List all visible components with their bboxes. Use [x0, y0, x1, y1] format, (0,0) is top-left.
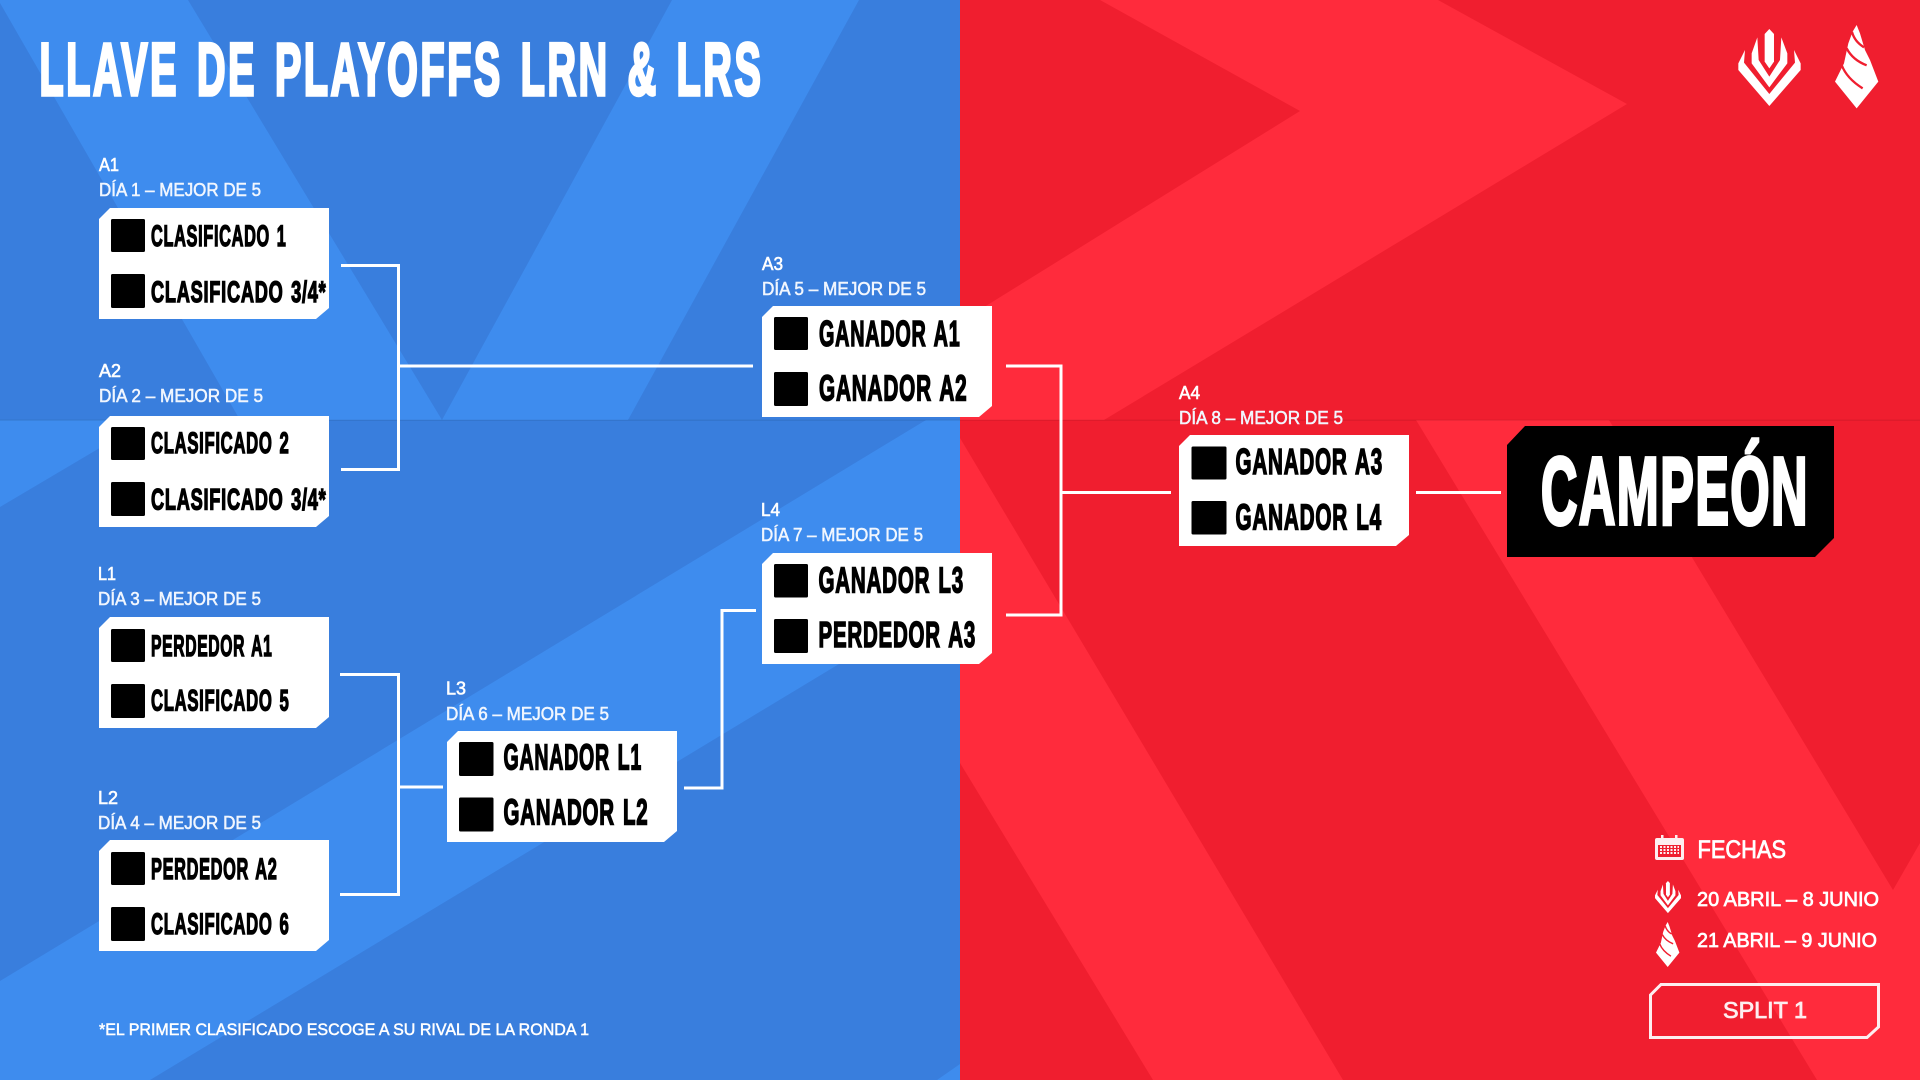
match L2: CLASIFICADO 6 [151, 908, 290, 941]
icon: LRN small [1655, 881, 1681, 913]
match L4: L4 [761, 499, 780, 520]
connector: A4 to champion [1416, 491, 1501, 494]
match L4: PERDEDOR A3 [818, 614, 976, 655]
match L3: GANADOR L2 [504, 792, 648, 832]
match A2 [99, 360, 329, 527]
match A4: DÍA 8 – MEJOR DE 5 [1179, 407, 1343, 428]
match L4: GANADOR L3 [818, 560, 964, 600]
champion box [1507, 426, 1834, 557]
connector: L3 to L4 [684, 610, 756, 788]
match L1: PERDEDOR A1 [151, 630, 272, 663]
connector: A3 and L4 to A4 [1006, 366, 1171, 615]
text: LRS dates: 21 ABRIL – 9 JUNIO [1697, 930, 1877, 952]
match A4 [1179, 382, 1409, 546]
match L1: DÍA 3 – MEJOR DE 5 [98, 588, 261, 609]
footnote: *EL PRIMER CLASIFICADO ESCOGE A SU RIVAL DE LA RONDA 1 [99, 1020, 589, 1039]
match L4 [761, 499, 992, 664]
match L2: PERDEDOR A2 [151, 853, 278, 886]
match A3: GANADOR A1 [819, 313, 960, 354]
match A1: DÍA 1 – MEJOR DE 5 [99, 179, 261, 200]
match L2 [98, 787, 329, 951]
match A2: DÍA 2 – MEJOR DE 5 [99, 385, 263, 406]
connector: A1 and A2 to A3 [341, 266, 753, 470]
match A4: A4 [1179, 382, 1200, 403]
match A3: A3 [762, 253, 783, 274]
match L2: L2 [98, 787, 118, 808]
match L1 [98, 563, 329, 728]
match A4: GANADOR A3 [1236, 441, 1383, 482]
button: split 1: SPLIT 1 [1723, 997, 1807, 1023]
logo: LRS emblem [1835, 25, 1878, 108]
logo: LRN emblem [1738, 29, 1801, 106]
icon: calendar [1655, 835, 1684, 860]
connector: L1 and L2 to L3 [340, 674, 443, 894]
match A1: CLASIFICADO 1 [151, 220, 286, 253]
title: LLAVE DE PLAYOFFS LRN & LRS [40, 28, 764, 111]
match L3: L3 [446, 678, 466, 698]
match A3 [762, 253, 992, 417]
match A1: A1 [99, 154, 119, 175]
match L2: DÍA 4 – MEJOR DE 5 [98, 812, 261, 833]
match L3 [446, 678, 677, 842]
match A3: DÍA 5 – MEJOR DE 5 [762, 278, 926, 299]
match A2: A2 [99, 360, 121, 381]
match L1: L1 [98, 563, 116, 584]
match L4: DÍA 7 – MEJOR DE 5 [761, 524, 923, 545]
match A1: CLASIFICADO 3/4* [151, 276, 326, 309]
match L3: GANADOR L1 [504, 736, 642, 778]
heading: fechas: FECHAS [1698, 836, 1786, 864]
match A2: CLASIFICADO 2 [151, 427, 290, 460]
match A2: CLASIFICADO 3/4* [151, 484, 326, 516]
match A1 [99, 154, 329, 319]
dates panel [1650, 835, 1879, 1038]
text: LRN dates: 20 ABRIL – 8 JUNIO [1697, 889, 1879, 911]
icon: LRS small [1656, 922, 1679, 967]
match A3: GANADOR A2 [819, 368, 968, 408]
match L1: CLASIFICADO 5 [151, 684, 290, 718]
button: split 1 [1650, 984, 1878, 1038]
match A4: GANADOR L4 [1236, 496, 1382, 538]
match L3: DÍA 6 – MEJOR DE 5 [446, 703, 609, 724]
